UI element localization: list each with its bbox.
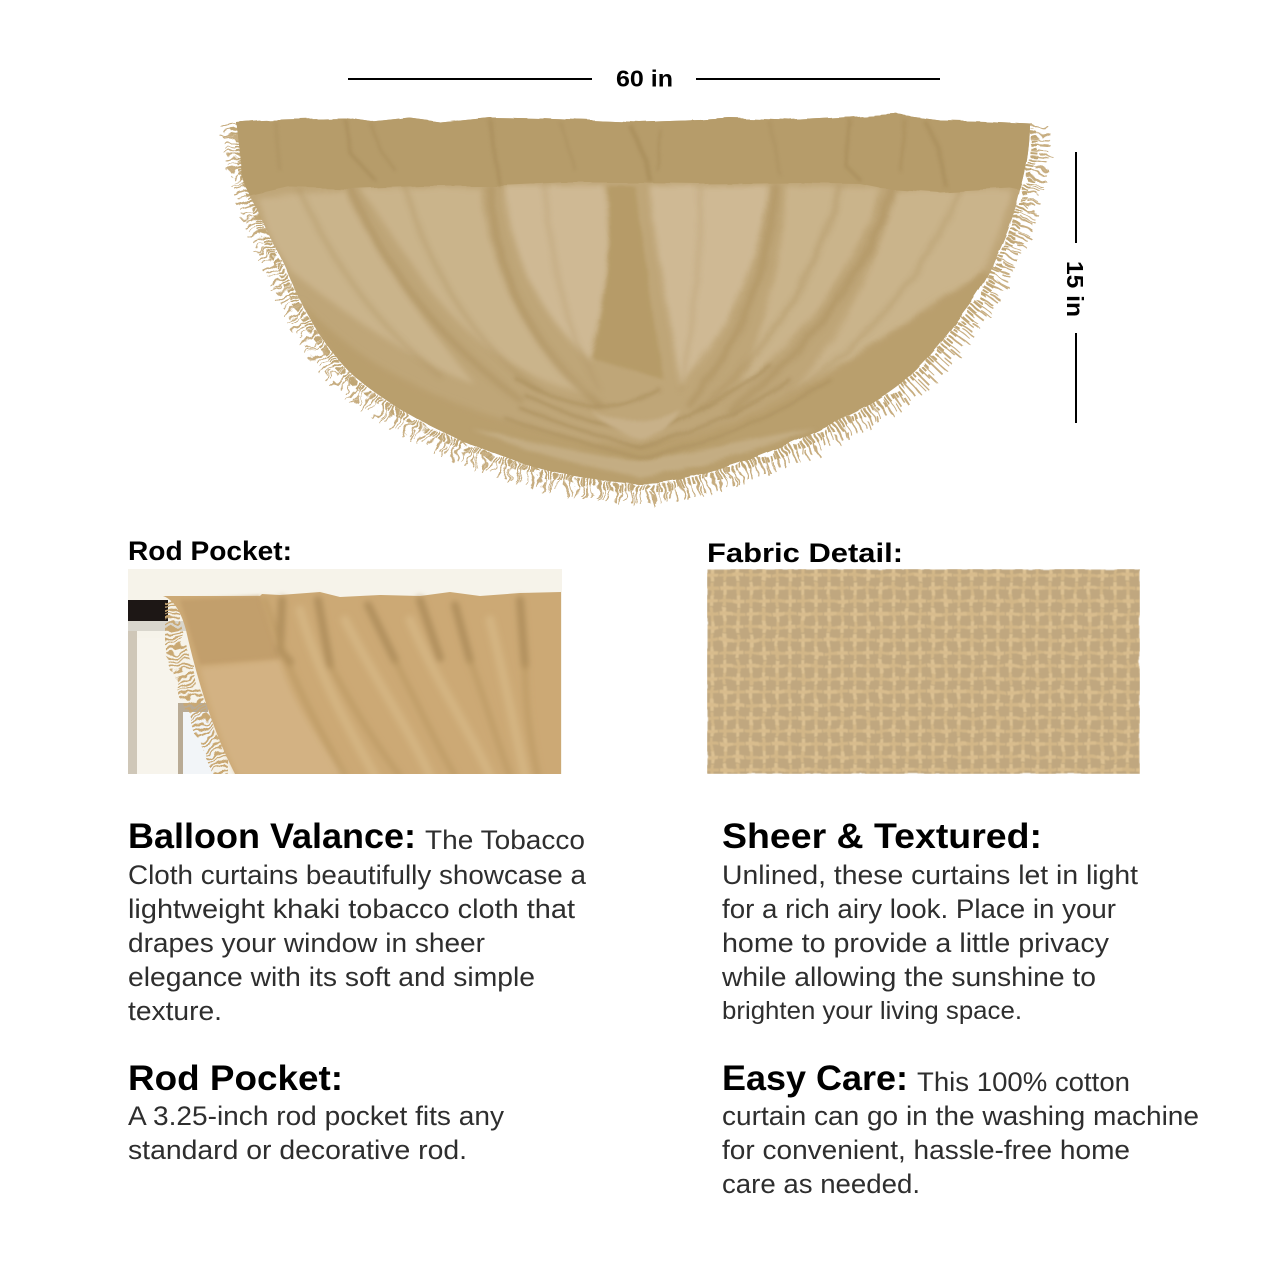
text block: Sheer and Textured: while allowing the sunshine to: [721, 962, 1096, 992]
top band shading: [180, 596, 280, 665]
heading: Rod Pocket: Rod Pocket:: [128, 536, 292, 566]
text block: Sheer and Textured: for a rich airy look. Place in your: [722, 894, 1116, 924]
lower-left light panel: [200, 660, 345, 776]
balloon valance curtain illustration: [220, 100, 1060, 500]
text block: Sheer and Textured: [721, 817, 1139, 1025]
text block: Easy Care: Easy Care:: [722, 1059, 908, 1098]
text block: Sheer and Textured: Sheer & Textured:: [722, 817, 1042, 856]
sheer light panels: [258, 186, 1012, 395]
text block: Rod Pocket: A 3.25-inch rod pocket fits any: [128, 1101, 505, 1131]
curtain rod: [128, 600, 168, 621]
text block: Rod Pocket: standard or decorative rod.: [128, 1135, 467, 1165]
text block: Rod Pocket: Rod Pocket:: [128, 1059, 343, 1098]
text block: Balloon Valance: drapes your window in sheer: [128, 928, 485, 958]
text block: Balloon Valance: [128, 817, 587, 1026]
text block: Easy Care: curtain can go in the washing machine: [722, 1101, 1199, 1131]
rod pocket fringe: [168, 600, 225, 776]
width dimension: 60 in: 60 in: [616, 66, 673, 92]
text block: Balloon Valance: lightweight khaki tobacco cloth that: [128, 894, 576, 924]
lower swag: [304, 272, 990, 485]
text block: Easy Care: This 100% cotton: [917, 1067, 1130, 1097]
text block: Rod Pocket: [128, 1059, 505, 1165]
text block: Balloon Valance: texture.: [128, 996, 222, 1026]
text block: Sheer and Textured: brighten your living space.: [722, 997, 1022, 1025]
photo: fabric weave detail: [707, 569, 1140, 774]
text block: Balloon Valance: Balloon Valance:: [128, 817, 416, 856]
height dimension: 15 in: 15 in: [1062, 261, 1088, 317]
text block: Easy Care: for convenient, hassle-free home: [722, 1135, 1130, 1165]
rod pocket band: [230, 110, 1040, 200]
curtain folds: [265, 600, 538, 776]
text block: Easy Care: [722, 1059, 1199, 1199]
text block: Sheer and Textured: Unlined, these curtains let in light: [722, 860, 1139, 890]
swag sheen: [470, 428, 815, 478]
window frame: [128, 621, 213, 774]
band gather folds: [346, 124, 942, 180]
heading: Fabric Detail: Fabric Detail:: [707, 538, 903, 568]
text block: Balloon Valance: Cloth curtains beautifully showcase a: [128, 860, 587, 890]
radiating fold lines: [300, 186, 960, 410]
photo: rod pocket detail: [128, 569, 562, 776]
centre nested folds: [505, 364, 790, 448]
text block: Easy Care: care as needed.: [722, 1169, 920, 1199]
gathered curtain: [163, 592, 561, 774]
curtain body: [236, 112, 1030, 485]
text block: Sheer and Textured: home to provide a little privacy: [722, 928, 1110, 958]
text block: Balloon Valance: elegance with its soft and simple: [128, 962, 535, 992]
dark centre wedge: [592, 186, 664, 380]
frayed fringe: [226, 125, 1046, 500]
text block: Balloon Valance: The Tobacco: [425, 825, 585, 855]
